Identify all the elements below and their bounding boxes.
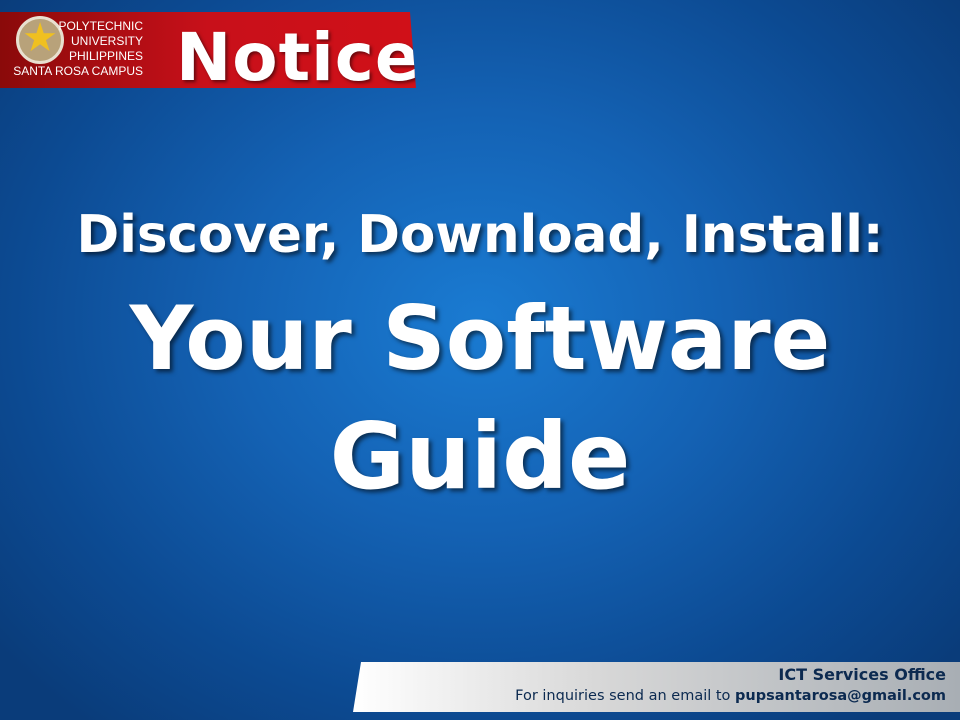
- notice heading: Notice: [176, 19, 421, 96]
- university logo and name: UNIVERSITY: [71, 34, 143, 48]
- title line 3: Guide: [330, 403, 630, 510]
- university logo and name: PHILIPPINES: [69, 49, 143, 63]
- footer contact bar: For inquiries send an email to pupsantarosa@gmail.com: [515, 688, 946, 704]
- title line 1: Discover, Download, Install:: [76, 205, 884, 265]
- university logo and name: [14, 16, 143, 75]
- footer contact bar: [353, 662, 960, 712]
- university logo and name: POLYTECHNIC: [59, 19, 143, 33]
- title line 2: Your Software: [130, 287, 830, 390]
- university logo and name: ★: [22, 15, 58, 61]
- university logo and name: SANTA ROSA CAMPUS: [13, 64, 143, 78]
- footer contact bar: ICT Services Office: [778, 665, 946, 684]
- header banner: [0, 12, 416, 88]
